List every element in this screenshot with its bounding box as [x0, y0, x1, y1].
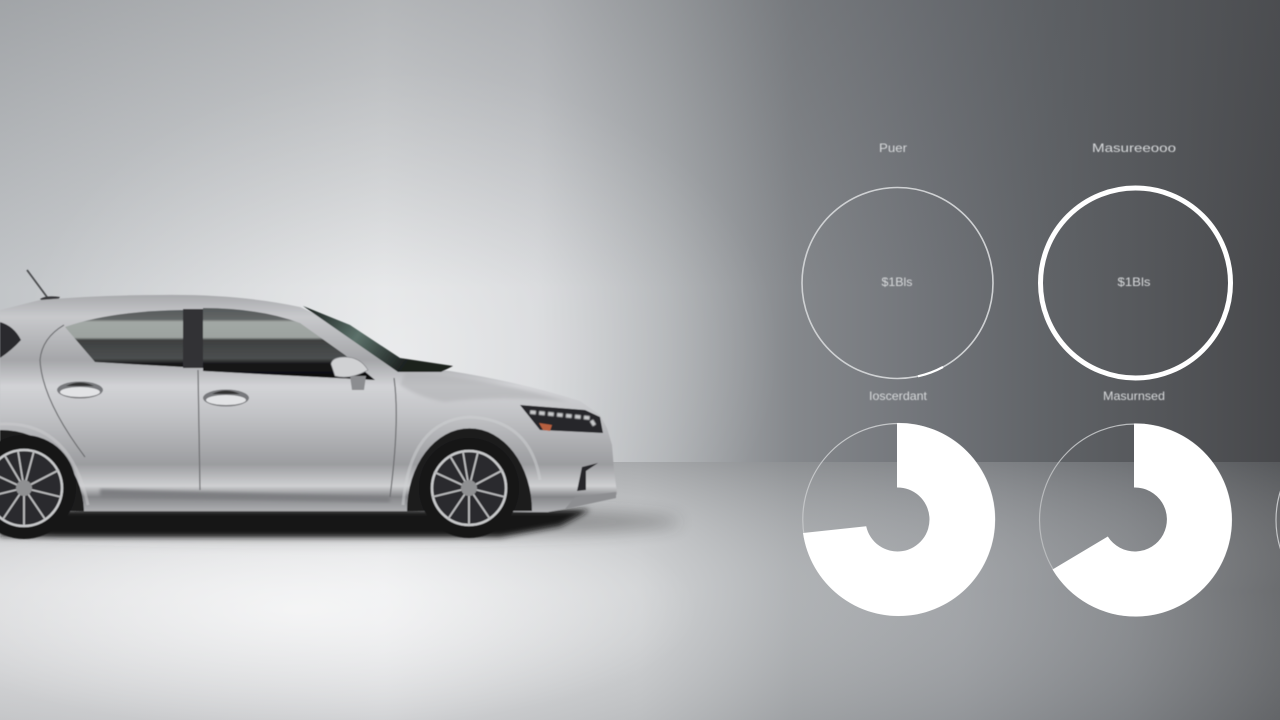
door pillar — [183, 309, 203, 368]
panel: fuel ring chart — [802, 141, 993, 378]
partial ring at right edge — [1276, 424, 1280, 616]
wheel: rear — [0, 435, 76, 539]
wheel: front — [419, 438, 519, 538]
donut segment — [1052, 423, 1232, 616]
value: $1Bls — [1118, 275, 1150, 289]
wheel arch lip: front — [403, 417, 540, 505]
front bumper lip — [565, 492, 616, 509]
rear side window — [65, 310, 183, 367]
wheel arch lip: rear — [0, 424, 88, 505]
car ground shadow — [0, 506, 680, 538]
bumper vent — [577, 463, 598, 491]
value: $1Bls — [882, 275, 912, 289]
panel: maintenance ring chart — [1040, 141, 1230, 378]
windshield — [303, 306, 453, 372]
label: Ioscerdant — [869, 389, 928, 403]
door handle rear — [57, 382, 103, 398]
thick ring — [1040, 188, 1230, 378]
background: studio floor — [0, 462, 1280, 720]
car body — [0, 295, 617, 512]
label: fuel: Puer — [879, 141, 907, 155]
illustration: silver car — [0, 270, 617, 539]
donut outline — [803, 424, 995, 616]
wheel arch: front — [407, 428, 532, 511]
rocker trim — [100, 489, 390, 502]
ring accent — [918, 367, 943, 376]
donut segment — [803, 423, 995, 616]
panel: right donut chart — [1040, 389, 1232, 616]
side mirror — [331, 357, 368, 390]
door seams — [40, 325, 396, 497]
headlight — [520, 405, 603, 433]
wheel arch: rear — [0, 430, 84, 511]
hood highlight — [400, 372, 570, 402]
thin ring — [802, 188, 993, 378]
under-car shadow — [0, 510, 590, 537]
label: Masurnsed — [1103, 389, 1165, 403]
panel: left donut chart — [803, 389, 995, 616]
label: maintenance: Masureeooo — [1092, 141, 1176, 155]
front side window — [203, 308, 375, 380]
antenna — [27, 270, 60, 300]
door handle front — [203, 390, 249, 406]
donut outline — [1040, 424, 1232, 616]
rear quarter window — [0, 322, 21, 358]
